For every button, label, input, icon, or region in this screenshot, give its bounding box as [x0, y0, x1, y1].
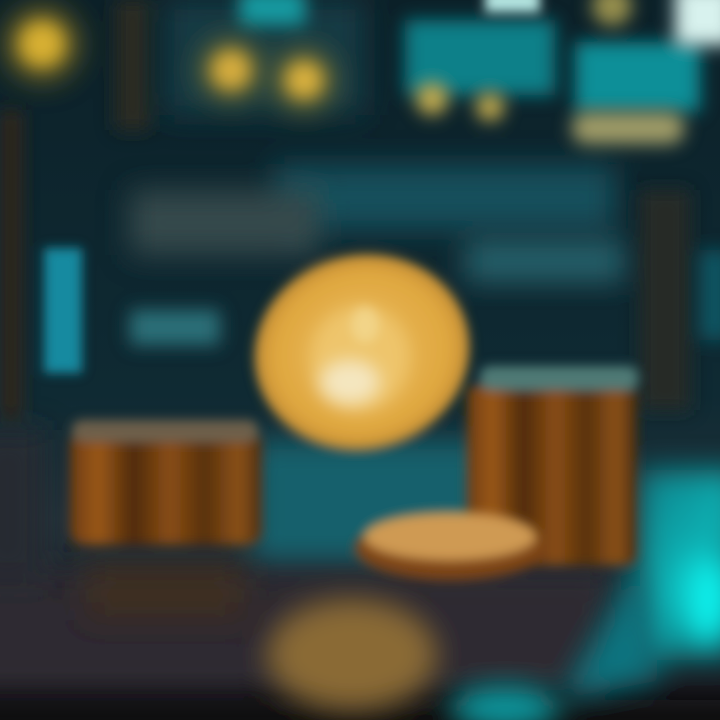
icon: left cyan bar	[44, 248, 82, 373]
panel: table surface	[0, 430, 720, 720]
coin reflection on table	[267, 599, 437, 711]
icon: floating gold coin	[234, 232, 490, 472]
panel: background screens	[0, 0, 720, 420]
flat coin on table	[355, 512, 545, 580]
cyan glow on table	[450, 470, 720, 720]
reflection of left stack	[85, 565, 245, 620]
left coin stack	[70, 420, 262, 545]
small teal screen block	[130, 310, 220, 345]
icon: yellow bokeh lights	[6, 0, 684, 144]
right coin stack	[467, 366, 638, 565]
panel: teal middle band	[250, 440, 490, 565]
